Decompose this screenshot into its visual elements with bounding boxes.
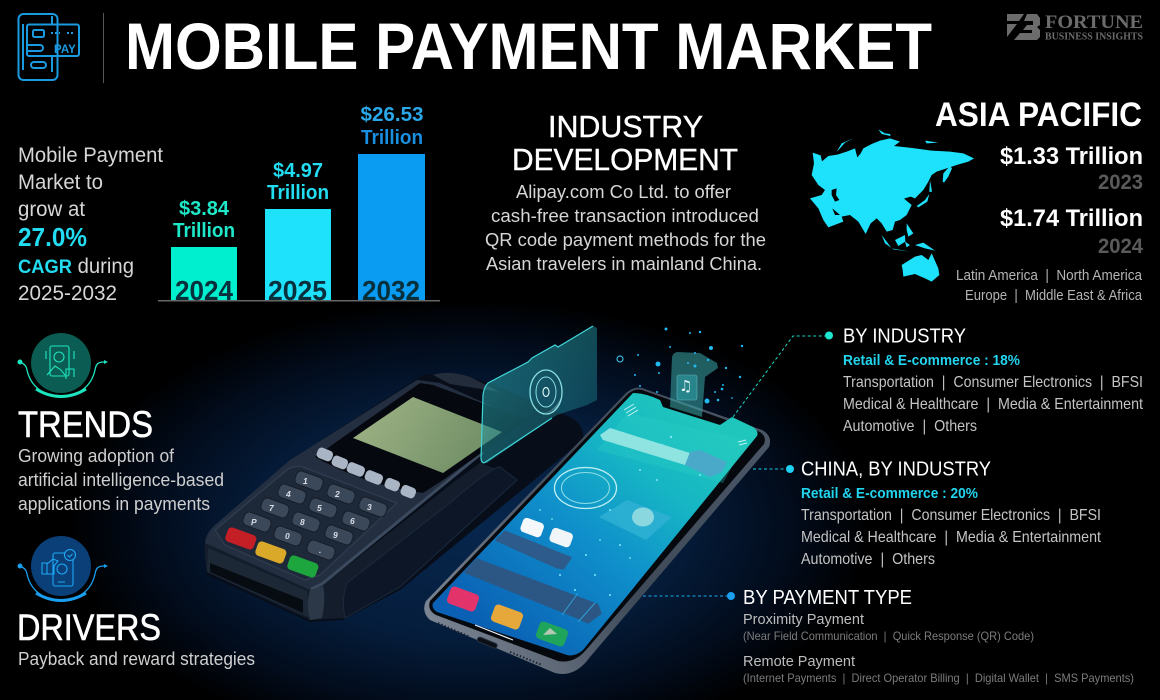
panel: Asia Pacific stats: Latin America | North America — [956, 268, 1143, 284]
illustration: function keys — [315, 446, 417, 500]
panel: by payment type: (Near Field Communication | Quick Response (QR) Code) — [743, 629, 1034, 643]
title: MOBILE PAYMENT MARKET — [125, 9, 932, 83]
text: CAGR summary: CAGR during — [18, 255, 134, 278]
illustration: keypad plate — [215, 466, 397, 580]
illustration: keypad: 9 — [333, 530, 338, 540]
icon: drivers — [18, 536, 108, 600]
bar chart: market size: 2032 — [362, 275, 420, 306]
panel: by payment type: (Internet Payments | Direct Operator Billing | Digital Wallet | SMS Payments) — [743, 671, 1134, 685]
panel: Asia Pacific stats — [935, 96, 1143, 304]
text: trends description: applications in payments — [18, 494, 210, 514]
illustration: keypad: 7 — [269, 503, 275, 513]
heading: drivers: DRIVERS — [17, 607, 161, 648]
illustration: keypad: 8 — [300, 517, 305, 527]
panel: china by industry: Automotive | Others — [801, 551, 935, 568]
illustration: keypad: 1 — [303, 476, 308, 486]
panel: Asia Pacific stats: 2023 — [1098, 171, 1143, 194]
bar chart: market size — [158, 104, 440, 306]
illustration: payment terminal — [205, 373, 583, 622]
panel: industry development: cash-free transaction introduced — [491, 206, 759, 226]
illustration: keypad: 2 — [334, 489, 340, 499]
panel: china by industry — [801, 458, 1101, 568]
panel: industry development: Alipay.com Co Ltd. to offer — [516, 182, 731, 202]
illustration: keypad: 3 — [367, 502, 372, 512]
panel: Asia Pacific stats: $1.33 Trillion — [1000, 143, 1143, 170]
illustration: colored keys — [224, 526, 319, 579]
illustration: screen bezel — [315, 383, 528, 493]
heading: trends: TRENDS — [18, 404, 153, 445]
bar chart: market size: 2025 — [268, 275, 327, 306]
icon: pay phone — [18, 14, 79, 80]
panel: industry development — [485, 109, 766, 274]
illustration: LCD screen — [353, 397, 502, 473]
illustration: holographic panel — [481, 326, 597, 463]
panel: china by industry: CHINA, BY INDUSTRY — [801, 458, 991, 480]
text: CAGR summary: grow at — [18, 198, 85, 221]
illustration: charging port and speakers — [438, 623, 542, 665]
text: trends description — [18, 446, 224, 514]
panel: industry development: QR code payment methods for the — [485, 230, 766, 250]
illustration: phone screen — [432, 393, 758, 655]
panel: industry development: Asian travelers in mainland China. — [486, 254, 762, 274]
bar chart: market size: $3.84 — [179, 198, 230, 220]
bar chart: market size: Trillion — [173, 220, 235, 242]
bar chart: market size: Trillion — [267, 182, 329, 204]
logo: Fortune Business Insights: FORTUNE — [1045, 12, 1143, 33]
panel: Asia Pacific stats: Europe | Middle East & Africa — [965, 288, 1143, 304]
bar chart: market size: 2024 — [175, 275, 233, 306]
illustration: keypad: 0 — [285, 531, 290, 541]
panel: industry development: INDUSTRY — [548, 109, 703, 144]
text: trends description: artificial intelligence-based — [18, 470, 224, 490]
panel: china by industry: Transportation | Consumer Electronics | BFSI — [801, 507, 1101, 524]
panel: by industry: BY INDUSTRY — [843, 326, 966, 348]
text: drivers description: Payback and reward strategies — [18, 649, 255, 669]
illustration: keypad: . — [319, 545, 321, 555]
panel: Asia Pacific stats: ASIA PACIFIC — [935, 96, 1142, 134]
icon: pay phone: PAY — [54, 44, 76, 56]
logo: Fortune Business Insights: BUSINESS INSIGHTS — [1045, 32, 1143, 42]
illustration: keypad: 5 — [317, 503, 322, 513]
illustration: keypad — [241, 470, 389, 561]
panel: industry development: DEVELOPMENT — [512, 142, 738, 177]
bar chart: market size: Trillion — [361, 127, 423, 149]
illustration: keypad: 4 — [285, 489, 291, 499]
logo: Fortune Business Insights — [1007, 12, 1143, 42]
panel: by payment type: Remote Payment — [743, 653, 856, 670]
panel: by payment type: BY PAYMENT TYPE — [743, 587, 912, 609]
panel: by payment type: Proximity Payment — [743, 611, 865, 628]
map: Asia Pacific — [810, 129, 974, 282]
panel: by industry — [843, 326, 1143, 435]
panel: china by industry: Medical & Healthcare | Media & Entertainment — [801, 529, 1101, 546]
text: CAGR summary — [18, 144, 163, 305]
bar chart: market size: $26.53 — [360, 104, 424, 126]
panel: by industry: Retail & E-commerce : 18% — [843, 353, 1020, 369]
panel: by payment type — [743, 587, 1134, 685]
panel: Asia Pacific stats: $1.74 Trillion — [1000, 205, 1143, 232]
icon: trends — [18, 333, 108, 396]
text: CAGR summary: Market to — [18, 171, 103, 194]
illustration: smartphone — [424, 388, 770, 674]
bar chart: market size: $4.97 — [273, 160, 323, 182]
connector: by payment type — [643, 592, 735, 600]
text: CAGR summary: Mobile Payment — [18, 144, 163, 167]
text: CAGR summary: 2025-2032 — [18, 282, 117, 305]
illustration: music hologram and particles — [617, 328, 743, 417]
illustration: keypad: 6 — [350, 516, 355, 526]
illustration: keypad: P — [251, 517, 257, 527]
connector: china — [753, 465, 794, 473]
panel: china by industry: Retail & E-commerce : 20% — [801, 486, 978, 502]
text: CAGR summary: 27.0% — [18, 222, 87, 252]
panel: Asia Pacific stats: 2024 — [1098, 235, 1143, 258]
text: trends description: Growing adoption of — [18, 446, 175, 466]
connector: by industry — [733, 332, 833, 417]
panel: by industry: Automotive | Others — [843, 418, 977, 435]
illustration: music hologram and particles: ♫ — [679, 377, 692, 395]
